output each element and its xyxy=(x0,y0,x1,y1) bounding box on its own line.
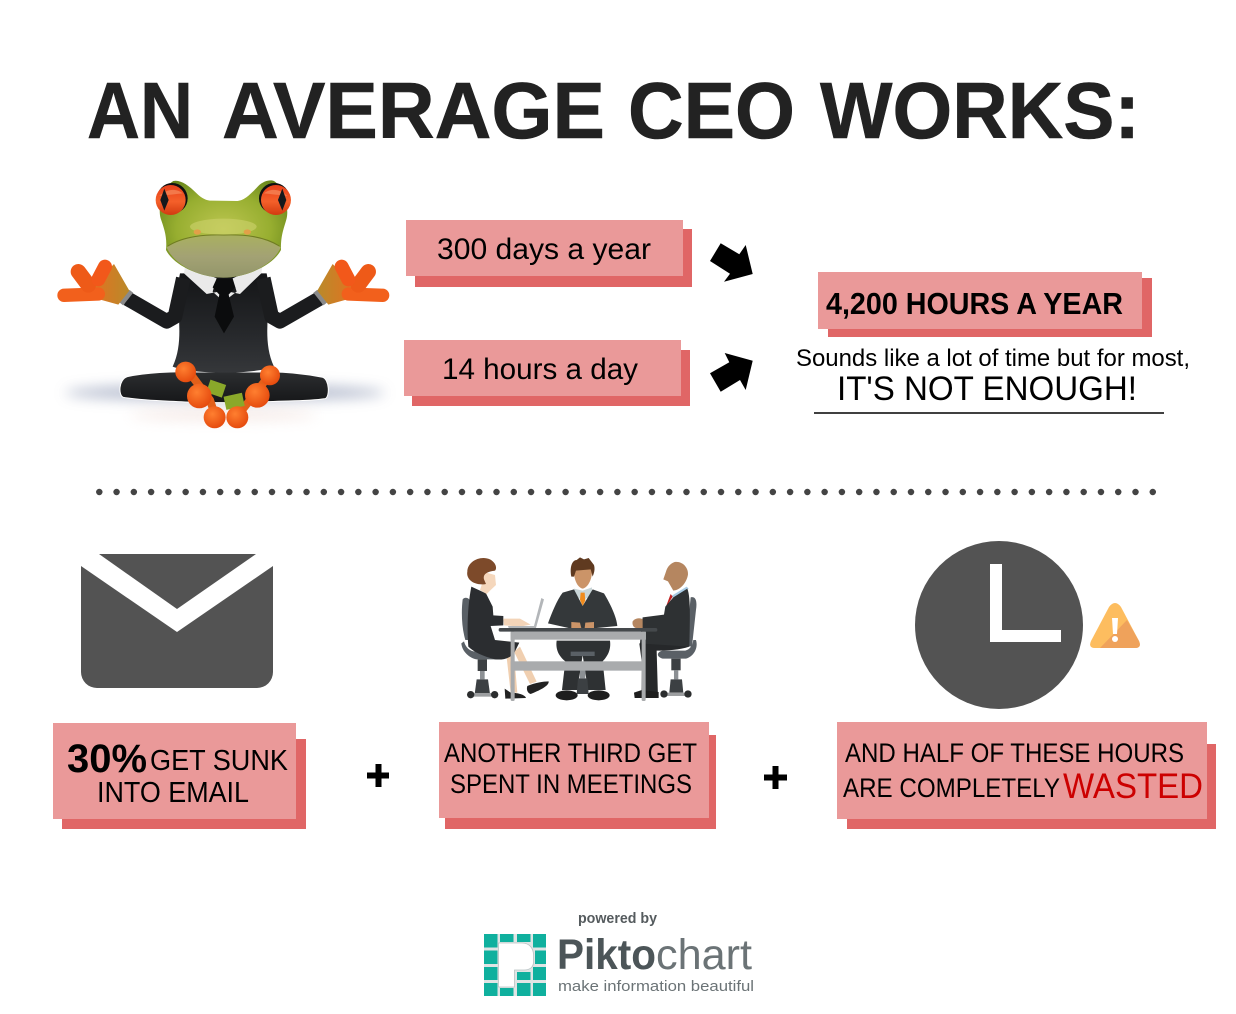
plus sign xyxy=(764,766,787,789)
text: it's not enough: IT'S NOT ENOUGH! xyxy=(837,370,1137,408)
laptop xyxy=(508,598,544,628)
title xyxy=(87,66,1140,155)
icon: envelope xyxy=(81,554,273,688)
footer: piktochart logo xyxy=(484,911,754,996)
frog left hand xyxy=(64,264,129,305)
box: wasted hours: WASTED xyxy=(1063,767,1203,806)
title: AVERAGE xyxy=(222,66,605,155)
frog legs xyxy=(120,372,328,403)
frog tie xyxy=(213,279,235,333)
frog left arm xyxy=(121,278,183,321)
box: wasted hours xyxy=(837,722,1216,829)
frog left eye xyxy=(156,183,188,215)
frog head xyxy=(160,180,287,278)
box: 14 hours a day xyxy=(404,340,690,406)
frog right eye xyxy=(259,183,291,215)
box: wasted hours: AND HALF OF THESE HOURS xyxy=(845,738,1184,768)
box: 30% email: GET SUNK xyxy=(150,745,289,777)
box: 14 hours a day: 14 hours a day xyxy=(442,353,638,386)
right man xyxy=(632,562,690,698)
wordmark: chart xyxy=(656,931,752,979)
box: meetings: SPENT IN MEETINGS xyxy=(450,769,692,799)
frog right arm xyxy=(263,278,325,321)
box: wasted hours: ARE COMPLETELY xyxy=(843,773,1060,803)
box: meetings xyxy=(439,722,716,829)
wordmark xyxy=(557,931,752,979)
frog shirt collar xyxy=(184,265,263,298)
table xyxy=(499,628,657,701)
box: 300 days a year: 300 days a year xyxy=(437,233,651,266)
wordmark: Pikto xyxy=(557,931,656,979)
text: powered by: powered by xyxy=(578,911,657,927)
left chair xyxy=(461,598,501,698)
frog right hand xyxy=(317,264,383,305)
icon: warning triangle xyxy=(1090,603,1140,648)
arrow: up right xyxy=(710,353,753,392)
arrow: down right xyxy=(710,243,753,282)
text: sounds like a lot of time: Sounds like a lot of time but for most, xyxy=(796,345,1190,372)
title: AN xyxy=(87,66,193,155)
centre man xyxy=(548,557,617,700)
right chair xyxy=(658,597,697,698)
tagline: make information beautiful xyxy=(558,978,754,995)
illustration: meditating frog in a suit xyxy=(64,180,385,428)
frog feet xyxy=(175,362,280,428)
box: 30% email xyxy=(53,723,306,829)
woman xyxy=(467,558,549,699)
frog shadow xyxy=(65,384,385,420)
plus sign xyxy=(367,764,389,787)
box: 4,200 hours a year xyxy=(818,272,1152,337)
frog chin xyxy=(167,235,281,278)
box: 30% email: 30% xyxy=(67,737,147,781)
box: meetings: ANOTHER THIRD GET xyxy=(444,738,697,768)
title: WORKS: xyxy=(820,66,1140,155)
title: CEO xyxy=(628,66,795,155)
logo mark xyxy=(484,934,546,996)
icon: clock xyxy=(915,541,1083,709)
illustration: three people in a meeting xyxy=(461,557,697,701)
box: 30% email: INTO EMAIL xyxy=(97,777,249,809)
frog jacket xyxy=(173,273,274,373)
box: 300 days a year xyxy=(406,220,692,287)
box: 4,200 hours a year: 4,200 HOURS A YEAR xyxy=(826,286,1123,321)
